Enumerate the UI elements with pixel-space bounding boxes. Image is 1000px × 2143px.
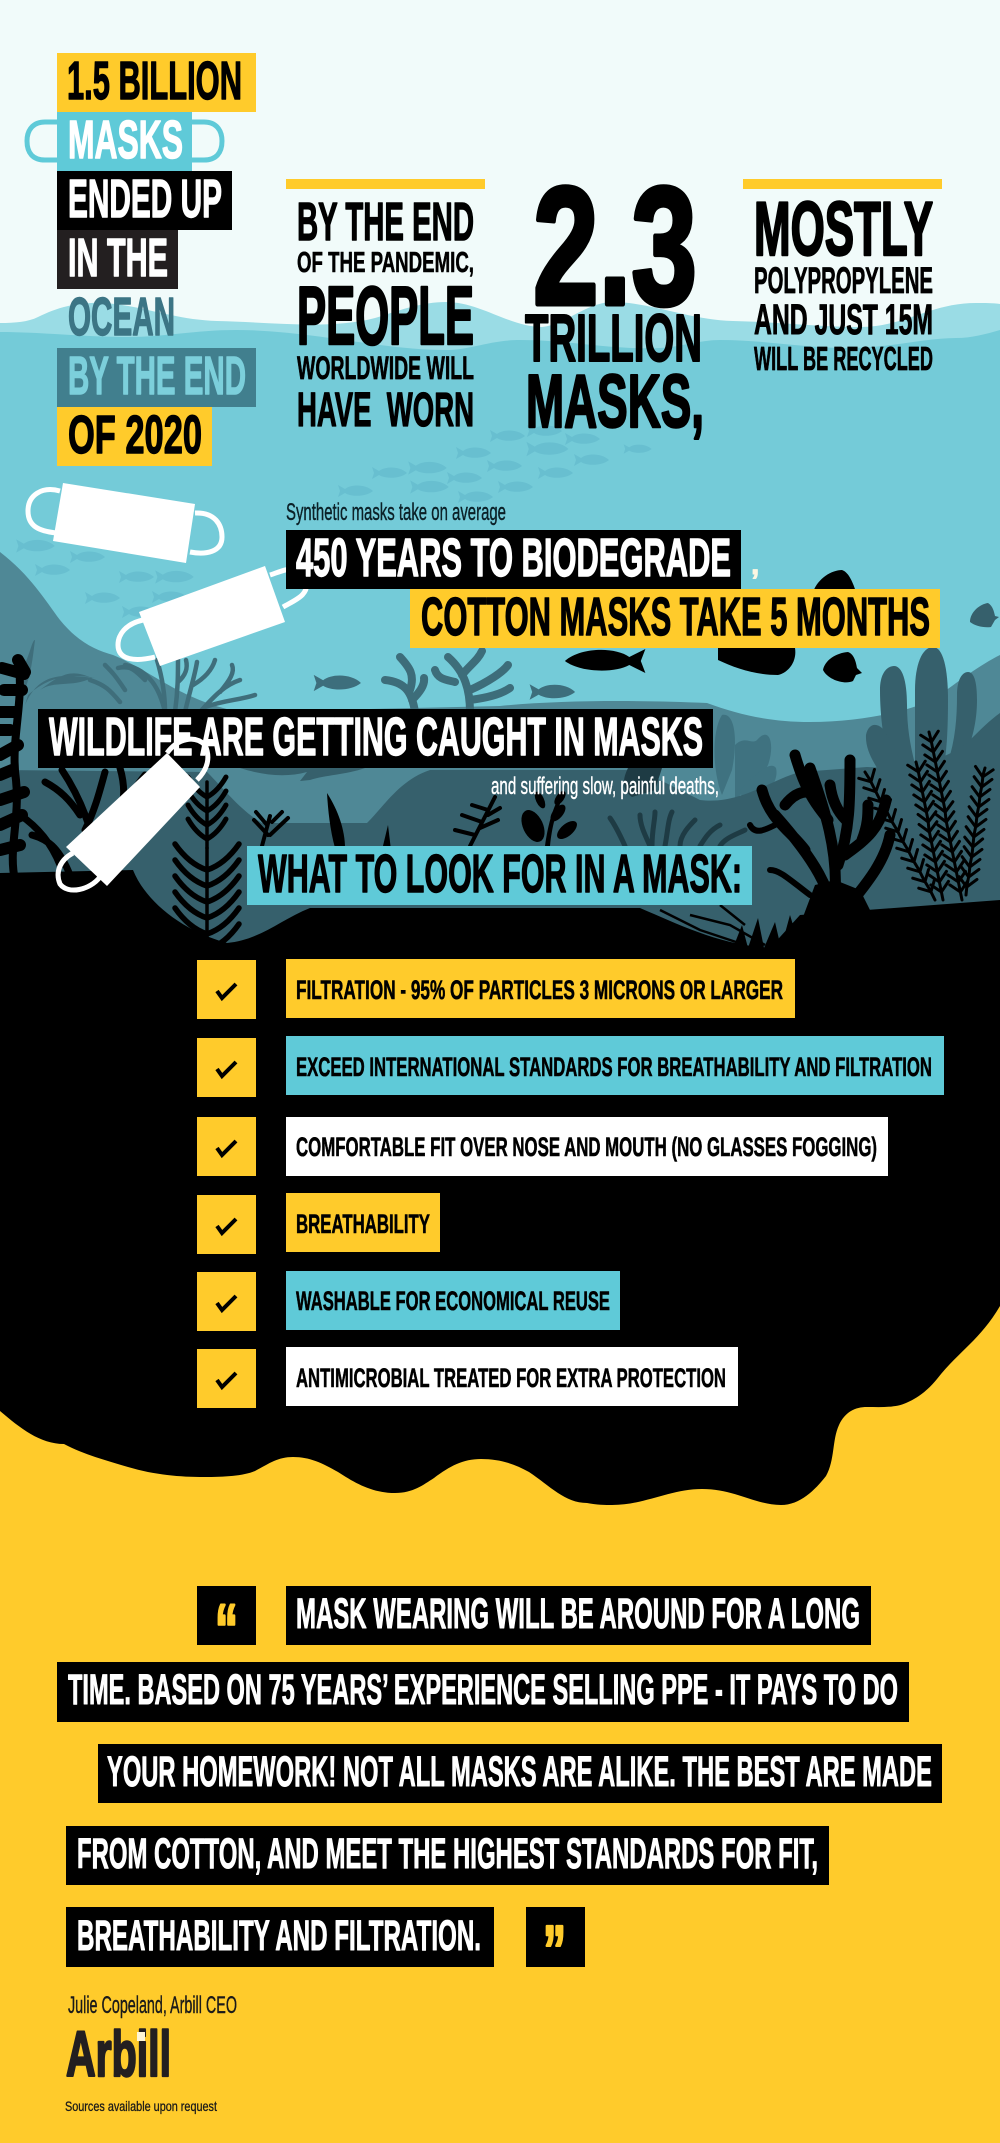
line: masks: MASKS bbox=[68, 110, 183, 170]
check item: washable bbox=[197, 1271, 620, 1331]
line: masks bbox=[57, 110, 192, 171]
teal coral left bbox=[90, 658, 255, 712]
check item: fit bbox=[197, 1117, 888, 1176]
line: ended up: ENDED UP bbox=[68, 169, 222, 229]
ocean water bbox=[0, 330, 1000, 1000]
label: wildlife are getting caught in masks bbox=[38, 707, 713, 768]
check item: standards bbox=[197, 1036, 944, 1097]
line: ocean: OCEAN bbox=[68, 287, 175, 347]
black fish bbox=[565, 570, 862, 682]
distant fish school bbox=[16, 425, 652, 618]
column: by the end of the pandemic: PEOPLE bbox=[297, 269, 474, 362]
column: by the end of the pandemic bbox=[286, 179, 485, 437]
caption: suffering: and suffering slow, painful deaths, bbox=[491, 773, 719, 800]
checklist bbox=[197, 959, 944, 1408]
line: 1.5 billion bbox=[57, 51, 256, 112]
headline stack: 1.5 billion masks ended up in the ocean by the end of 2020 bbox=[27, 51, 256, 466]
check item: antimicrobial: ANTIMICROBIAL TREATED FOR EXTRA PROTECTION bbox=[296, 1363, 726, 1393]
sources note: Sources available upon request bbox=[65, 2098, 217, 2114]
column: by the end of the pandemic: HAVE WORN bbox=[297, 384, 474, 437]
black seabed spikes bbox=[733, 915, 800, 948]
check item: washable: WASHABLE FOR ECONOMICAL REUSE bbox=[296, 1286, 610, 1316]
yellow rule bbox=[286, 179, 485, 189]
close quote icon: ” bbox=[543, 1911, 566, 1989]
quote line 5 bbox=[66, 1907, 494, 1967]
quote block bbox=[57, 1586, 942, 1989]
black branching coral right bbox=[750, 755, 890, 930]
hidden dark fish under the label bbox=[240, 768, 365, 781]
close quote icon bbox=[526, 1907, 585, 1989]
black creature behind caption bbox=[624, 768, 662, 797]
column: by the end of the pandemic: BY THE END bbox=[297, 192, 474, 252]
tall kelp lobes on the right bbox=[866, 647, 977, 800]
quote line 5: BREATHABILITY AND FILTRATION. bbox=[77, 1912, 481, 1960]
dark branching coral row bbox=[610, 812, 745, 846]
yellow ground wave bbox=[0, 1306, 1000, 2143]
mask illustration second bbox=[118, 566, 307, 666]
check item: breathability: BREATHABILITY bbox=[296, 1209, 430, 1239]
column: by the end of the pandemic: WORLDWIDE WILL bbox=[297, 350, 474, 386]
teal leaves left bbox=[22, 640, 95, 705]
line: 1.5 billion: 1.5 BILLION bbox=[67, 51, 242, 111]
background sea hills bbox=[0, 552, 1000, 950]
line: of 2020: OF 2020 bbox=[68, 405, 202, 465]
check item: breathability bbox=[197, 1193, 440, 1254]
big number: 2.3 bbox=[533, 152, 697, 340]
line: of 2020 bbox=[57, 405, 212, 466]
line: in the: IN THE bbox=[68, 228, 168, 288]
column: 2.3 trillion masks bbox=[525, 152, 704, 443]
open quote icon bbox=[197, 1586, 256, 1668]
dark sea hills bbox=[0, 713, 1000, 950]
attribution: Julie Copeland, Arbill CEO bbox=[68, 1992, 237, 2019]
kelp fern centre bbox=[205, 782, 209, 958]
column: by the end of the pandemic: OF THE PANDEMIC, bbox=[297, 247, 474, 279]
small black plants bbox=[327, 789, 580, 850]
quote line 1 bbox=[286, 1586, 871, 1645]
column: 2.3 trillion masks: TRILLION bbox=[525, 301, 702, 376]
yellow rule bbox=[743, 179, 942, 189]
teal coral centre bbox=[385, 651, 510, 712]
small dark fish bbox=[314, 603, 999, 700]
mid kelp lobes bbox=[714, 715, 777, 810]
label: 450 years to biodegrade bbox=[286, 528, 741, 589]
heading: what to look for in a mask bbox=[247, 844, 752, 905]
column: 2.3 trillion masks: MASKS, bbox=[526, 359, 704, 443]
line: by the end bbox=[57, 346, 256, 407]
line: in the bbox=[57, 228, 178, 289]
line: by the end: BY THE END bbox=[68, 346, 246, 406]
Arbill logo bbox=[66, 2018, 171, 2090]
mask illustration top bbox=[28, 483, 222, 563]
check item: filtration bbox=[197, 959, 795, 1019]
small fern plants bbox=[254, 797, 500, 846]
Arbill logo: Arbill bbox=[66, 2018, 171, 2090]
light back wave bbox=[0, 302, 1000, 500]
mask ear loops bbox=[27, 122, 222, 160]
rock cracks bbox=[660, 905, 765, 945]
quote line 4 bbox=[66, 1826, 829, 1885]
line: ended up bbox=[57, 169, 232, 230]
mask illustration third bbox=[58, 739, 208, 890]
check item: antimicrobial bbox=[197, 1347, 738, 1408]
black ferns right bbox=[865, 732, 985, 900]
caption: synthetic masks: Synthetic masks take on average bbox=[286, 499, 506, 526]
foreground black left kelp bbox=[0, 660, 145, 880]
column: mostly polypropylene bbox=[743, 179, 942, 377]
comma after label: , bbox=[751, 548, 759, 581]
open quote icon: “ bbox=[215, 1590, 238, 1668]
floor black bbox=[0, 870, 1000, 1530]
